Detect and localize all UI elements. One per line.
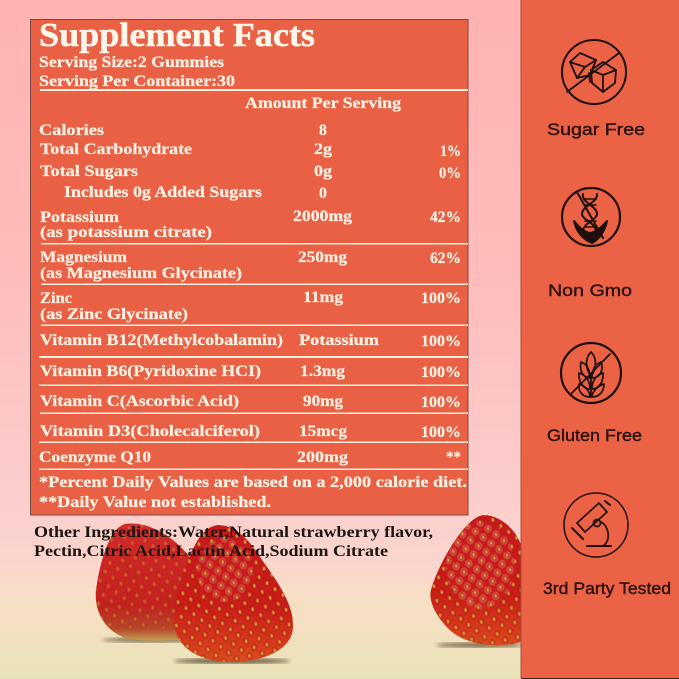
strawberry: front centre	[172, 525, 293, 664]
row: zinc: Zinc	[40, 290, 72, 307]
row: vitamin B6: 1.3mg	[300, 363, 345, 380]
row: potassium: Potassium	[40, 209, 119, 226]
panel: product claims sidebar	[520, 0, 679, 679]
row: vitamin D3: 15mcg	[299, 423, 347, 440]
row: added sugars	[64, 184, 327, 202]
column heading: Amount Per Serving	[245, 95, 401, 112]
panel: supplement facts table	[30, 17, 468, 515]
icon: third party tested microscope	[564, 493, 628, 557]
icon: non gmo	[562, 188, 620, 246]
label: non gmo: Non Gmo	[548, 281, 632, 300]
label: third party tested: 3rd Party Tested	[543, 579, 671, 598]
row: vitamin C: 100%	[421, 394, 461, 411]
footnotes: *Percent Daily Values are based on a 2,000 calorie diet.	[39, 474, 467, 491]
row: vitamin B6: 100%	[421, 364, 461, 381]
row: added sugars: Includes 0g Added Sugars	[64, 184, 262, 201]
icon: gluten free	[561, 343, 621, 403]
row: total sugars: Total Sugars	[40, 163, 138, 180]
row: vitamin D3	[40, 423, 461, 441]
title: Supplement Facts	[39, 17, 315, 54]
row: coenzyme Q10: Coenzyme Q10	[39, 449, 151, 466]
row: zinc: 11mg	[303, 289, 343, 306]
row: potassium: 2000mg	[293, 208, 352, 225]
row: vitamin B12: 100%	[421, 333, 461, 350]
row: magnesium	[40, 249, 461, 282]
row: added sugars: 0	[319, 185, 327, 202]
row: vitamin C: 90mg	[303, 393, 343, 410]
other ingredients text	[34, 524, 433, 560]
serving information: Serving Size:2 Gummies	[39, 54, 224, 71]
label: sugar free: Sugar Free	[547, 120, 645, 139]
row: vitamin B12	[40, 332, 461, 350]
row: total sugars	[40, 163, 461, 182]
row: potassium: 42%	[430, 209, 461, 226]
table dividers	[39, 89, 468, 470]
row: total carbohydrate: 2g	[314, 141, 332, 158]
row: vitamin C	[40, 393, 461, 411]
row: zinc: (as Zinc Glycinate)	[40, 306, 188, 323]
row: coenzyme Q10: **	[446, 449, 461, 466]
row: vitamin B12: Potassium	[299, 332, 379, 349]
row: total sugars: 0%	[439, 165, 461, 182]
row: vitamin B6: Vitamin B6(Pyridoxine HCI)	[40, 363, 261, 380]
other ingredients text: Other Ingredients:Water,Natural strawberry flavor,	[34, 524, 433, 541]
row: calories: Calories	[39, 122, 104, 139]
row: vitamin B6	[40, 363, 461, 381]
row: zinc: 100%	[421, 290, 461, 307]
row: total carbohydrate: 1%	[440, 143, 461, 160]
row: total carbohydrate	[40, 141, 461, 160]
row: calories: 8	[319, 122, 327, 139]
row: potassium: (as potassium citrate)	[40, 224, 212, 241]
row: calories	[39, 122, 327, 139]
serving information	[39, 54, 235, 90]
row: vitamin D3: 100%	[421, 424, 461, 441]
other ingredients text: Pectin,Citric Acid,Lactin Acid,Sodium Citrate	[34, 543, 388, 560]
label: gluten free: Gluten Free	[547, 426, 642, 445]
row: magnesium: 250mg	[298, 249, 347, 266]
row: potassium	[40, 208, 461, 241]
row: magnesium: Magnesium	[40, 249, 127, 266]
footnotes: **Daily Value not established.	[39, 494, 271, 511]
row: coenzyme Q10	[39, 449, 461, 466]
photo: strawberries	[90, 510, 524, 665]
row: vitamin C: Vitamin C(Ascorbic Acid)	[40, 393, 239, 410]
row: vitamin D3: Vitamin D3(Cholecalciferol)	[40, 423, 260, 440]
row: coenzyme Q10: 200mg	[297, 449, 348, 466]
row: zinc	[40, 289, 461, 323]
icon: sugar free	[562, 40, 626, 104]
row: total sugars: 0g	[314, 163, 332, 180]
footnotes	[39, 474, 467, 511]
serving information: Serving Per Container:30	[39, 73, 235, 90]
row: total carbohydrate: Total Carbohydrate	[40, 141, 192, 158]
strawberry: right	[430, 515, 520, 648]
row: magnesium: 62%	[430, 250, 461, 267]
row: magnesium: (as Magnesium Glycinate)	[40, 265, 242, 282]
strawberry: back left	[96, 524, 190, 643]
row: vitamin B12: Vitamin B12(Methylcobalamin)	[40, 332, 283, 349]
